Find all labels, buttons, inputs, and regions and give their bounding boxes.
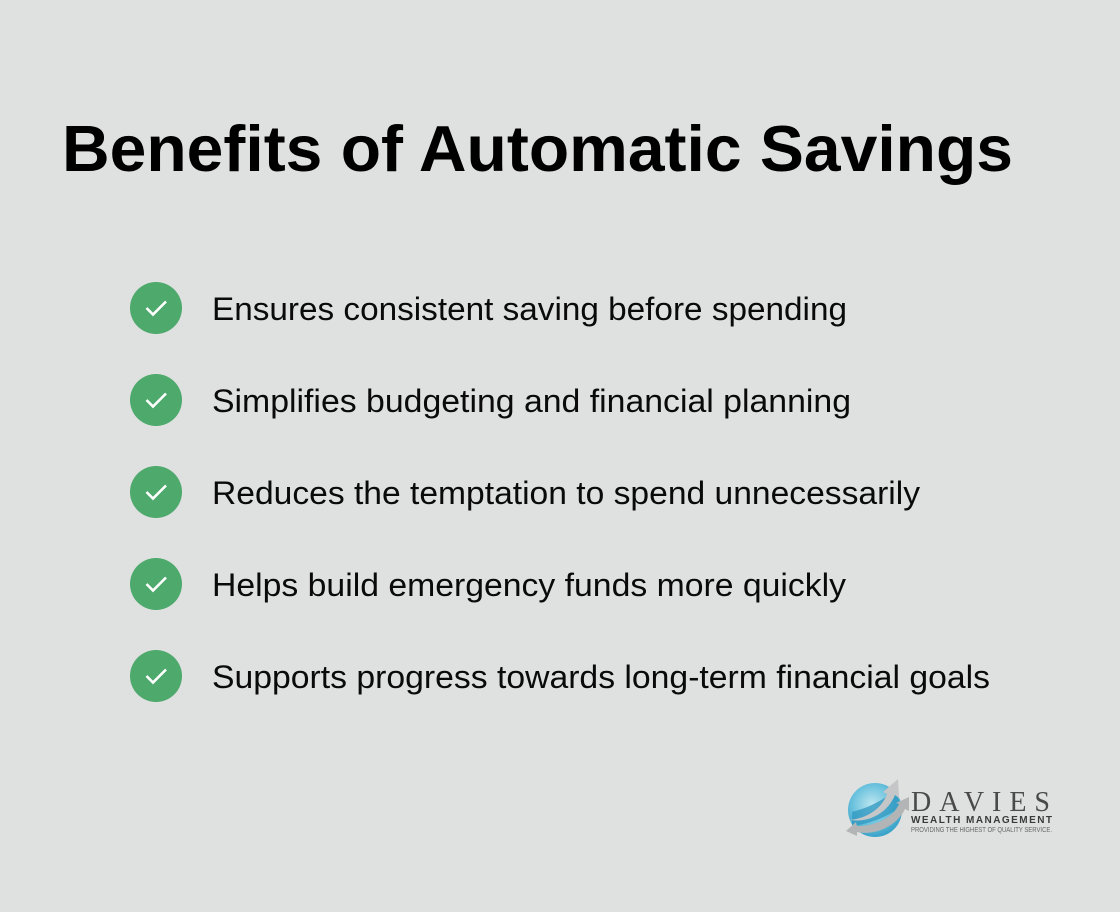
text: item 5: Supports progress towards long-term financial goals (212, 659, 990, 695)
text: item 3: Reduces the temptation to spend unnecessarily (212, 475, 920, 511)
list item 4 (130, 558, 846, 610)
logo: Davies Wealth Management (846, 779, 1052, 837)
icon: globe with arrows (846, 779, 909, 837)
icon: check 2 (130, 374, 182, 426)
list item 1 (130, 282, 847, 334)
text: item 2: Simplifies budgeting and financial planning (212, 383, 851, 419)
logo name: DAVIES (911, 787, 1050, 818)
list item 2 (130, 374, 851, 426)
icon: check 4 (130, 558, 182, 610)
logo subtitle: WEALTH MANAGEMENT (911, 815, 1052, 826)
list item 3 (130, 466, 920, 518)
logo tagline: PROVIDING THE HIGHEST OF QUALITY SERVICE. (911, 827, 1052, 834)
icon: check 1 (130, 282, 182, 334)
text: item 4: Helps build emergency funds more quickly (212, 567, 846, 603)
text: item 1: Ensures consistent saving before spending (212, 291, 847, 327)
icon: check 3 (130, 466, 182, 518)
title: Benefits of Automatic Savings (62, 112, 1013, 185)
icon: check 5 (130, 650, 182, 702)
list item 5 (130, 650, 990, 702)
